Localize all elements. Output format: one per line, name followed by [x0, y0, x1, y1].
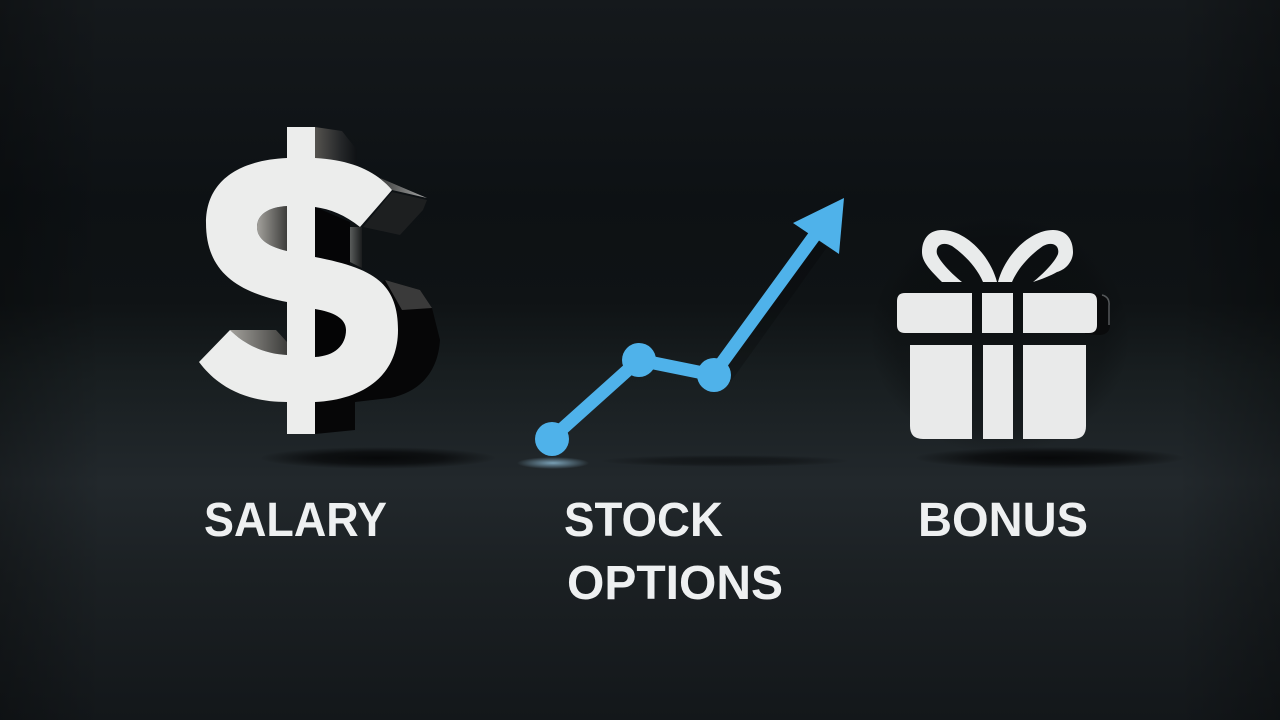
gift lid edge: [1085, 293, 1110, 335]
label: stock options: OPTIONS: [567, 557, 783, 610]
chart line: [552, 235, 815, 438]
chart points: [535, 343, 731, 456]
gift halo: [870, 215, 1130, 455]
dollar 3D extrusion: [230, 127, 440, 434]
dollar face: [199, 127, 398, 434]
gift lid: [897, 293, 1097, 333]
icon: gift box: [870, 215, 1130, 455]
gift bow: [922, 230, 1073, 282]
label: stock options: STOCK: [564, 494, 723, 547]
chart shadow: [726, 244, 822, 378]
floor shadows: [260, 447, 1185, 469]
label: bonus: BONUS: [918, 494, 1088, 547]
icon: dollar sign: [199, 127, 440, 434]
gift lid edge highlight: [1102, 295, 1109, 325]
arrow head: [793, 198, 844, 254]
label: salary: SALARY: [204, 494, 387, 547]
gift box body: [910, 345, 1086, 439]
label: stock options: [564, 494, 783, 610]
icon: rising stock chart arrow: [535, 198, 844, 456]
